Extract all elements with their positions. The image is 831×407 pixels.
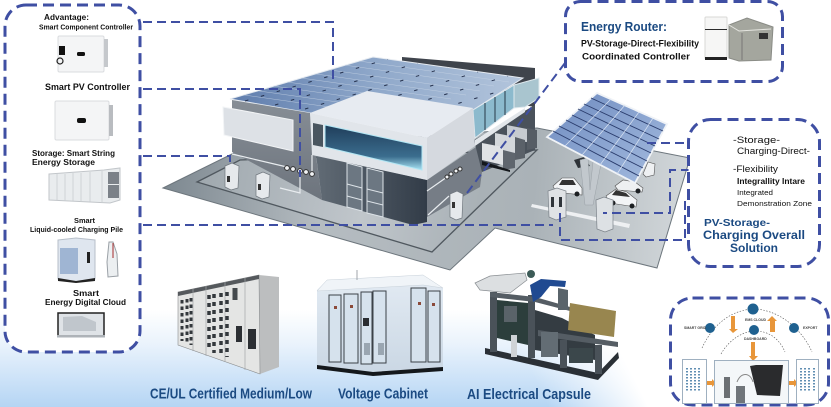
panel: energy router [566,2,782,82]
icon: PV controller [55,101,113,140]
bottom captions: Voltage Cabinet [338,386,428,402]
label: string energy storage [32,149,115,167]
garage bay [474,105,535,172]
bottom captions: AI Electrical Capsule [467,386,591,403]
left wall [232,100,322,200]
solution description: Demonstration Zone [737,199,812,208]
white upper block [310,91,475,180]
canopy uprights [580,158,601,205]
ground lot [163,128,690,270]
glazed band [473,85,525,146]
white conduits [232,154,449,215]
router description [581,38,699,62]
product: AI electrical capsule [475,270,619,380]
router description: PV-Storage-Direct-Flexibility [581,38,699,48]
product: medium low voltage cabinet [178,275,279,374]
left data panel [682,360,706,404]
label: charging pile: Liquid-cooled Charging Pile [30,225,123,234]
panel: overall solution [688,120,820,266]
solar canopy [547,93,667,183]
icon: charging pile [107,242,118,277]
solution description [733,135,812,208]
raised slab [197,150,537,252]
product: voltage cabinet [317,270,443,376]
icon: storage container [49,168,120,203]
icon: monitor [57,313,105,338]
label: charging pile [30,216,123,234]
solution description: -Storage- [733,135,780,146]
rooftop unit [514,78,539,108]
parked cars [553,157,655,208]
connector lines [143,22,690,240]
label: digital cloud: Energy Digital Cloud [45,297,126,307]
solution description: Charging-Direct- [737,146,810,156]
bottom captions [150,386,591,403]
charging stations [548,188,613,232]
back parapet [402,57,535,107]
building and site illustration [163,57,690,270]
node labels: EMS CLOUD [745,318,766,322]
advantage heading: Smart Component Controller [39,24,133,32]
chargers at building [225,163,463,220]
heading: overall solution: PV-Storage- [704,217,771,229]
wall meters [285,166,462,179]
node labels: SMART GRID [684,326,707,330]
router description: Coordinated Controller [582,52,690,62]
background wave [0,310,831,407]
solution description: -Flexibility [733,164,779,174]
white sign panel [223,107,293,151]
heading: overall solution [703,217,805,255]
right data panel [796,360,818,404]
heading: energy router: Energy Router: [581,19,667,34]
label: digital cloud: Smart [73,288,99,298]
delivery vans [482,125,537,172]
advantage heading [39,12,133,32]
diagram arcs [702,309,812,354]
label: smart PV controller: Smart PV Controller [45,82,130,93]
advantage heading: Advantage: [44,12,89,22]
label: digital cloud [45,288,126,307]
centre equipment panel [714,360,788,404]
heading: overall solution: Solution [730,241,778,255]
icon: liquid cooled charger [58,238,95,283]
orange flow arrows [706,316,798,387]
right wall [427,143,482,217]
label: string energy storage: Storage: Smart String [32,149,115,158]
solution description: Integrallity Intare [737,177,806,186]
node labels: EXPORT [803,326,818,330]
icon: component controller [57,36,108,72]
node labels [684,318,818,341]
bottom captions: CE/UL Certified Medium/Low [150,386,312,402]
illuminated window [325,125,422,170]
label: charging pile: Smart [74,216,95,225]
panel: product list [5,5,140,352]
solar roof [230,56,524,113]
heading: overall solution: Charging Overall [703,228,805,242]
label: string energy storage: Energy Storage [32,158,96,167]
entrance doors [347,163,383,217]
panel: system diagram [670,298,828,405]
icon: router cabinet [705,17,727,60]
icon nodes [705,304,799,335]
centre entrance [316,155,427,225]
kerb rail [531,204,630,228]
node labels: DASHBOARD [744,337,767,341]
solution description: Integrated [737,188,773,197]
icon: router enclosure [729,18,773,61]
